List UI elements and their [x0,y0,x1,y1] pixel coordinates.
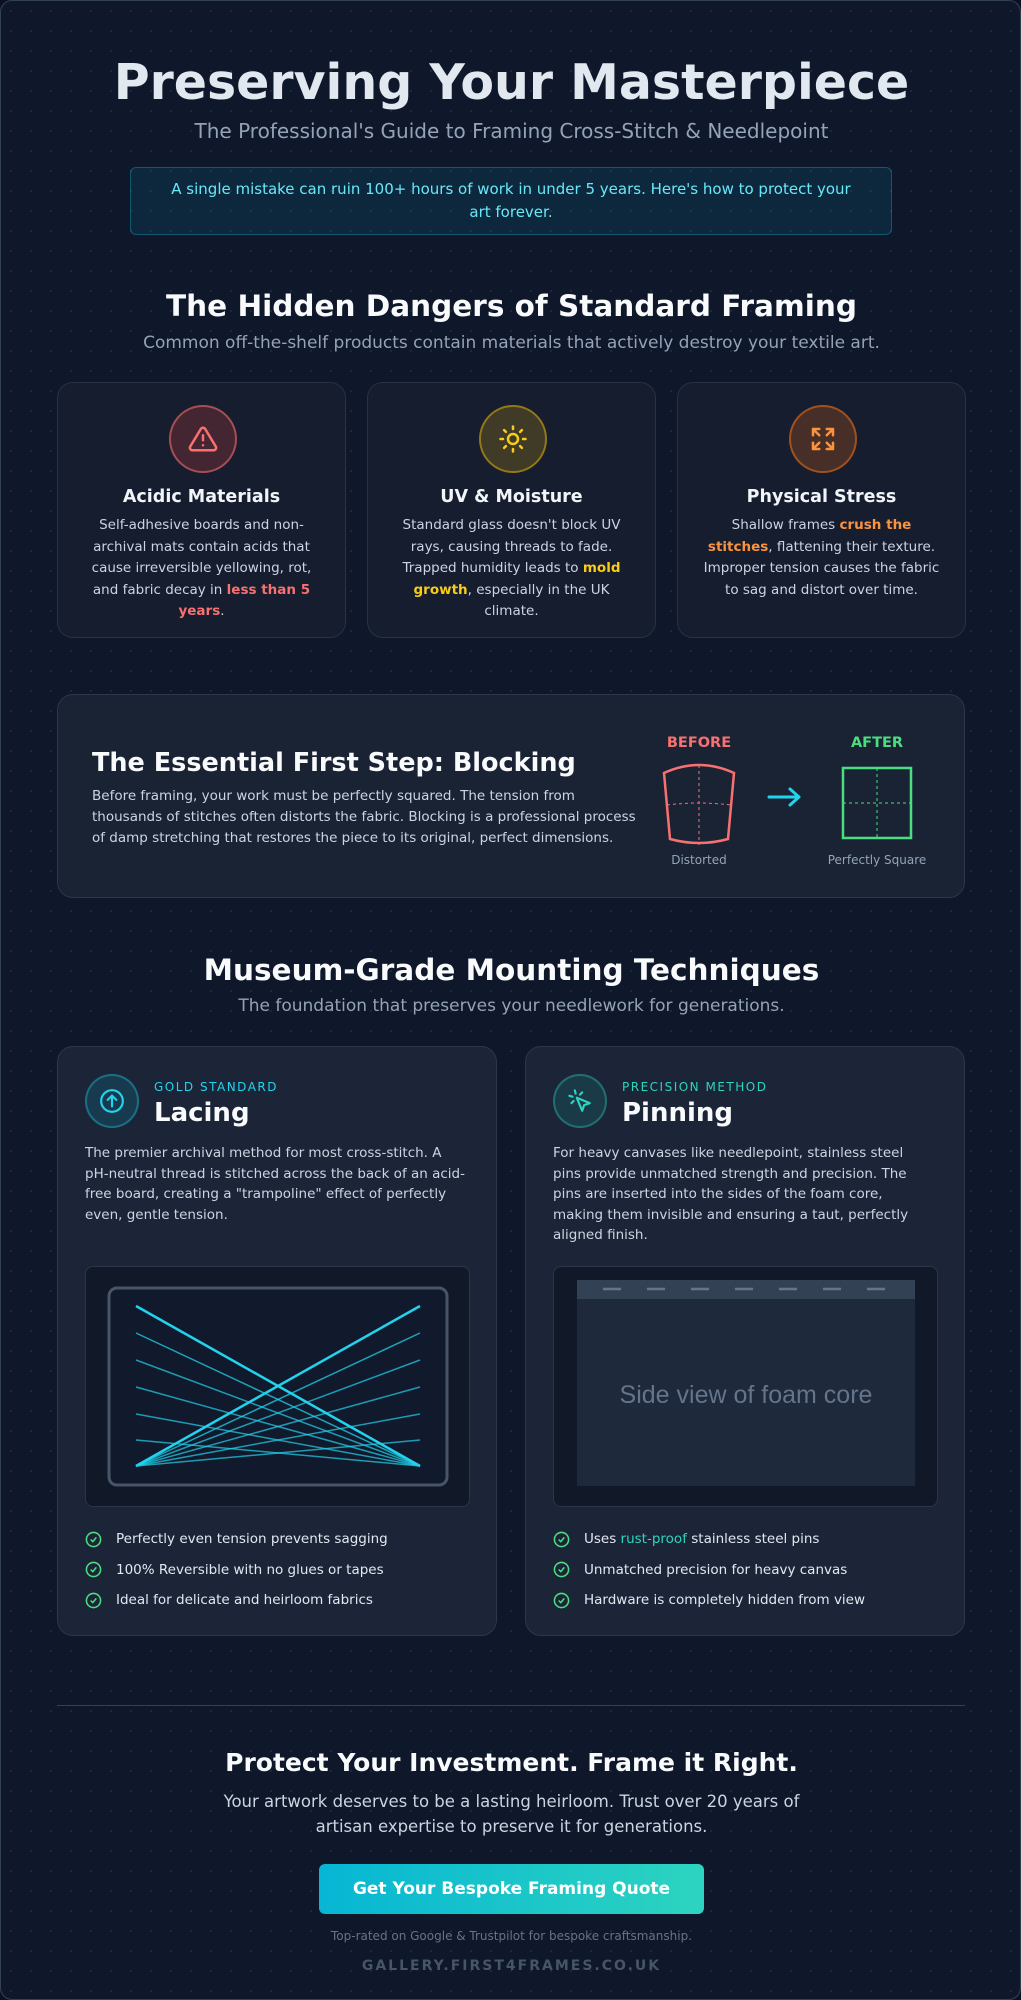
subheading: The foundation that preserves your needlework for generations. [238,996,785,1016]
diagram: before after [662,735,926,867]
checklist: pinning: Uses stainless steel pins [584,1531,819,1547]
checklist: pinning: Hardware is completely hidden from view [584,1592,865,1608]
button [319,1864,704,1914]
footer url: GALLERY.FIRST4FRAMES.CO.UK [362,1958,661,1974]
subheading: Common off-the-shelf products contain materials that actively destroy your textile art. [143,333,880,353]
button: Get Your Bespoke Framing Quote [353,1879,670,1899]
blocking text: Before framing, your work must be perfectly squared. The tension from thousands of stitches often distorts the fabric. Blocking is a professional process of damp stretching that restores the piece to its original, perfect dimensions. [92,788,636,846]
rating note: Top-rated on Google & Trustpilot for bespoke craftsmanship. [331,1929,692,1943]
callout [130,167,892,235]
panel: pinning: PRECISION METHOD [622,1080,767,1094]
heading: hidden dangers: The Hidden Dangers of Standard Framing [166,289,857,323]
panel: acidic materials: Self-adhesive boards and non-archival mats contain acids that cause irreversible yellowing, rot, and fabric decay in less than 5 years. [92,517,311,619]
panel: physical stress: Physical Stress [747,487,896,507]
checklist: lacing: Perfectly even tension prevents sagging [116,1531,388,1547]
icon: warning [169,405,237,473]
illustration: foam core: Side view of foam core [620,1381,872,1409]
heading: mounting techniques: Museum-Grade Mounting Techniques [204,953,819,987]
callout: A single mistake can ruin 100+ hours of work in under 5 years. Here's how to protect your art forever. [171,180,851,221]
panel: physical stress [677,382,966,638]
diagram: before after: AFTER [851,735,903,751]
panel: lacing: Lacing [154,1098,250,1128]
title: Preserving Your Masterpiece [114,54,909,111]
blocking title: The Essential First Step: Blocking [92,748,576,778]
panel: pinning: For heavy canvases like needlepoint, stainless steel pins provide unmatched strength and precision. The pins are inserted into the sides of the foam core, making them invisible and ensuring a taut, perfectly aligned finish. [553,1145,908,1243]
panel: blocking [57,694,965,898]
panel: uv & moisture: Standard glass doesn't block UV rays, causing threads to fade. Trapped humidity leads to mold growth, especially in the UK climate. [402,517,620,619]
icon: sun [479,405,547,473]
panel: acidic materials: Acidic Materials [123,487,280,507]
subtitle: The Professional's Guide to Framing Cross-Stitch & Needlepoint [195,119,828,143]
panel: acidic materials [57,382,346,638]
icon: compress arrows [789,405,857,473]
diagram: before after: Perfectly Square [828,853,926,867]
illustration: lacing [85,1266,470,1507]
diagram: before after: BEFORE [667,735,731,751]
checklist: pinning: rust-proof [621,1531,687,1547]
checklist: pinning [554,1531,865,1608]
panel: lacing: GOLD STANDARD [154,1080,278,1094]
illustration: foam core [553,1266,938,1507]
panel: pinning [525,1046,965,1636]
diagram: before after: Distorted [671,853,727,867]
panel: lacing [57,1046,497,1636]
panel: uv & moisture: UV & Moisture [440,487,583,507]
panel: pinning: Pinning [622,1098,733,1128]
cta text: Your artwork deserves to be a lasting heirloom. Trust over 20 years of artisan expertise to preserve it for generations. [224,1792,799,1836]
icon: lacing [85,1074,139,1128]
checklist: pinning: Unmatched precision for heavy canvas [584,1562,847,1578]
panel: physical stress: Shallow frames crush the stitches, flattening their texture. Improper tension causes the fabric to sag and distort over time. [704,517,939,598]
checklist: lacing: 100% Reversible with no glues or tapes [116,1562,384,1578]
cta heading: Protect Your Investment. Frame it Right. [225,1748,798,1777]
checklist: lacing: Ideal for delicate and heirloom fabrics [116,1592,373,1608]
icon: pinning [553,1074,607,1128]
panel: lacing: The premier archival method for most cross-stitch. A pH-neutral thread is stitched across the back of an acid-free board, creating a "trampoline" effect of perfectly even, gentle tension. [85,1145,465,1222]
panel: uv & moisture [367,382,656,638]
checklist: lacing [86,1531,388,1608]
